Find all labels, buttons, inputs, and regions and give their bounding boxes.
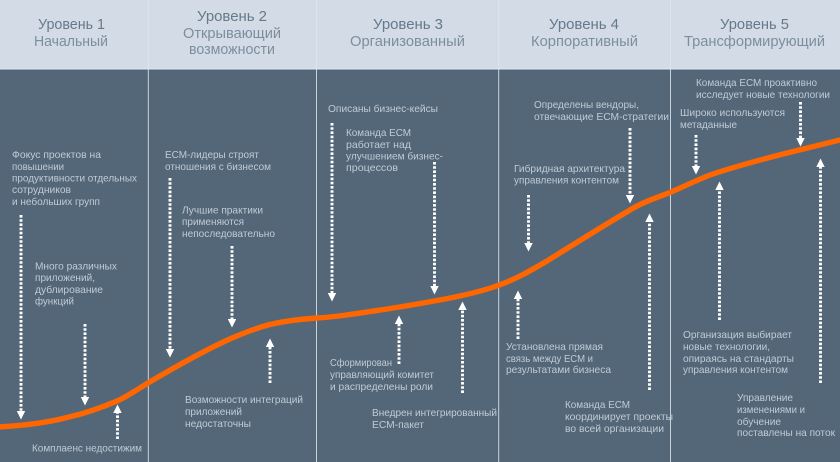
text: project focus: Фокус проектов на	[12, 150, 101, 161]
heading: level 3	[350, 17, 465, 50]
text: ECM leaders: отношения с бизнесом	[165, 161, 271, 173]
text: new technologies research	[696, 78, 830, 101]
text: business link: связь между ЕСМ и	[506, 354, 593, 365]
arrow: hybrid architecture to curve	[524, 195, 533, 252]
heading: level 5: Трансформирующий	[684, 34, 825, 50]
heading: level 3: Организованный	[350, 34, 465, 50]
heading: level 5: Уровень 5	[720, 17, 789, 33]
arrow: integration to curve	[266, 338, 274, 383]
text: project focus	[12, 150, 138, 208]
text: integration capabilities	[185, 395, 303, 430]
heading: level 2: Открывающий	[183, 26, 281, 42]
text: project focus: продуктивности отдельных	[12, 174, 138, 184]
text: vendors: отвечающие ЕСМ-стратегии	[534, 112, 669, 123]
arrow: project coordination to curve	[645, 214, 654, 390]
text: hybrid architecture: Гибридная архитектура	[514, 163, 625, 175]
text: technology selection: опираясь на стандарты	[683, 354, 794, 365]
text: project focus: сотрудников	[12, 185, 71, 196]
arrow: business cases to curve	[328, 123, 336, 302]
text: integrated package	[372, 408, 497, 431]
text: hybrid architecture: управления контентом	[514, 176, 619, 186]
text: vendors	[534, 100, 669, 123]
text: metadata: метаданные	[680, 120, 737, 131]
text: ECM team: Команда ЕСМ	[346, 128, 411, 139]
arrow: project focus to curve	[17, 215, 25, 420]
text: hybrid architecture	[514, 163, 625, 186]
text: best practices	[182, 206, 275, 240]
heading: level 5	[684, 17, 825, 50]
arrow: metadata to curve	[692, 135, 700, 174]
text: compliance: Комплаенс недостижим	[32, 444, 142, 454]
heading: level 1	[34, 17, 108, 50]
text: steering committee: управляющий комитет	[330, 370, 434, 381]
text: metadata: Широко используются	[680, 108, 785, 119]
arrow: change management to curve	[816, 158, 825, 383]
arrow: ECM team to curve	[430, 162, 439, 294]
heading: level 1: Уровень 1	[38, 17, 105, 33]
text: integration capabilities: Возможности интеграций	[185, 395, 303, 406]
text: project coordination: во всей организации	[565, 424, 664, 435]
text: business link: Установлена прямая	[506, 342, 603, 353]
text: ECM leaders: ЕСМ-лидеры строят	[165, 150, 259, 161]
text: best practices: непоследовательно	[182, 229, 275, 240]
text: many applications: функций	[35, 296, 74, 308]
panel: level 2	[148, 0, 316, 462]
text: project coordination: Команда ЕСМ	[565, 400, 630, 411]
text: business link: результатами бизнеса	[506, 364, 611, 376]
text: change management	[737, 393, 835, 439]
text: business link	[506, 342, 611, 376]
text: integrated package: ЕСМ-пакет	[372, 420, 424, 431]
arrow: technology selection to curve	[715, 182, 724, 320]
text: new technologies research: Команда ЕСМ проактивно	[696, 78, 817, 89]
text: ECM team: улучшением бизнес-	[346, 150, 443, 162]
arrow: best practices to curve	[228, 246, 236, 328]
text: ECM leaders	[165, 150, 271, 173]
text: many applications: Много различных	[35, 262, 118, 272]
text: project focus: повышении	[12, 162, 64, 173]
text: vendors: Определены вендоры,	[534, 100, 639, 111]
text: project coordination	[565, 400, 673, 435]
heading: level 2: возможности	[189, 42, 275, 58]
heading: level 4: Корпоративный	[531, 34, 638, 50]
text: change management: обучение	[737, 416, 781, 428]
text: technology selection	[683, 329, 794, 376]
text: ECM team: работает над	[346, 139, 411, 151]
arrow: business link to curve	[514, 290, 522, 339]
arrow: ECM leaders to curve	[166, 178, 174, 358]
panel: level 4	[498, 0, 673, 462]
arrow: vendors to curve	[626, 128, 634, 204]
text: integration capabilities: недостаточны	[185, 419, 251, 430]
arrow: integrated package to curve	[458, 302, 467, 393]
text: many applications: приложений,	[35, 273, 95, 284]
text: technology selection: управления контентом	[683, 365, 788, 376]
text: integrated package: Внедрен интегрированный	[372, 408, 497, 419]
text: many applications	[35, 262, 118, 308]
heading: level 4	[531, 17, 638, 50]
arrow: compliance to curve	[113, 404, 122, 439]
heading: level 3: Уровень 3	[373, 17, 443, 33]
text: project focus: и небольших групп	[12, 196, 100, 208]
text: best practices: применяются	[182, 217, 244, 228]
text: ECM team	[346, 128, 443, 174]
text: change management: поставлены на поток	[737, 428, 835, 439]
text: integration capabilities: приложений	[185, 407, 242, 418]
text: new technologies research: исследует новые технологии	[696, 90, 830, 101]
heading: level 4: Уровень 4	[549, 17, 619, 33]
text: change management: Управление	[737, 393, 793, 404]
text: many applications: дублирование	[35, 284, 103, 296]
panel: level 5	[670, 0, 840, 462]
text: metadata	[680, 108, 785, 131]
text: change management: изменениями и	[737, 405, 805, 416]
heading: level 2	[183, 9, 281, 58]
arrow: many applications to curve	[81, 324, 89, 406]
text: steering committee	[330, 357, 434, 393]
text: best practices: Лучшие практики	[182, 206, 263, 216]
text: project coordination: координирует проекты	[565, 412, 673, 423]
arrow: steering committee to curve	[395, 316, 403, 364]
arrow: new technologies research to curve	[796, 102, 805, 146]
panel: level 1	[0, 0, 148, 462]
text: technology selection: новые технологии,	[683, 342, 770, 353]
text: technology selection: Организация выбирает	[683, 329, 792, 341]
heading: level 1: Начальный	[34, 34, 108, 50]
maturity curve	[0, 140, 840, 427]
text: steering committee: Сформирован	[330, 357, 392, 369]
text: steering committee: и распределены роли	[330, 382, 433, 393]
panel: level 3	[316, 0, 498, 462]
heading: level 2: Уровень 2	[197, 9, 267, 25]
text: ECM team: процессов	[346, 163, 398, 174]
text: business cases: Описаны бизнес-кейсы	[328, 103, 438, 115]
